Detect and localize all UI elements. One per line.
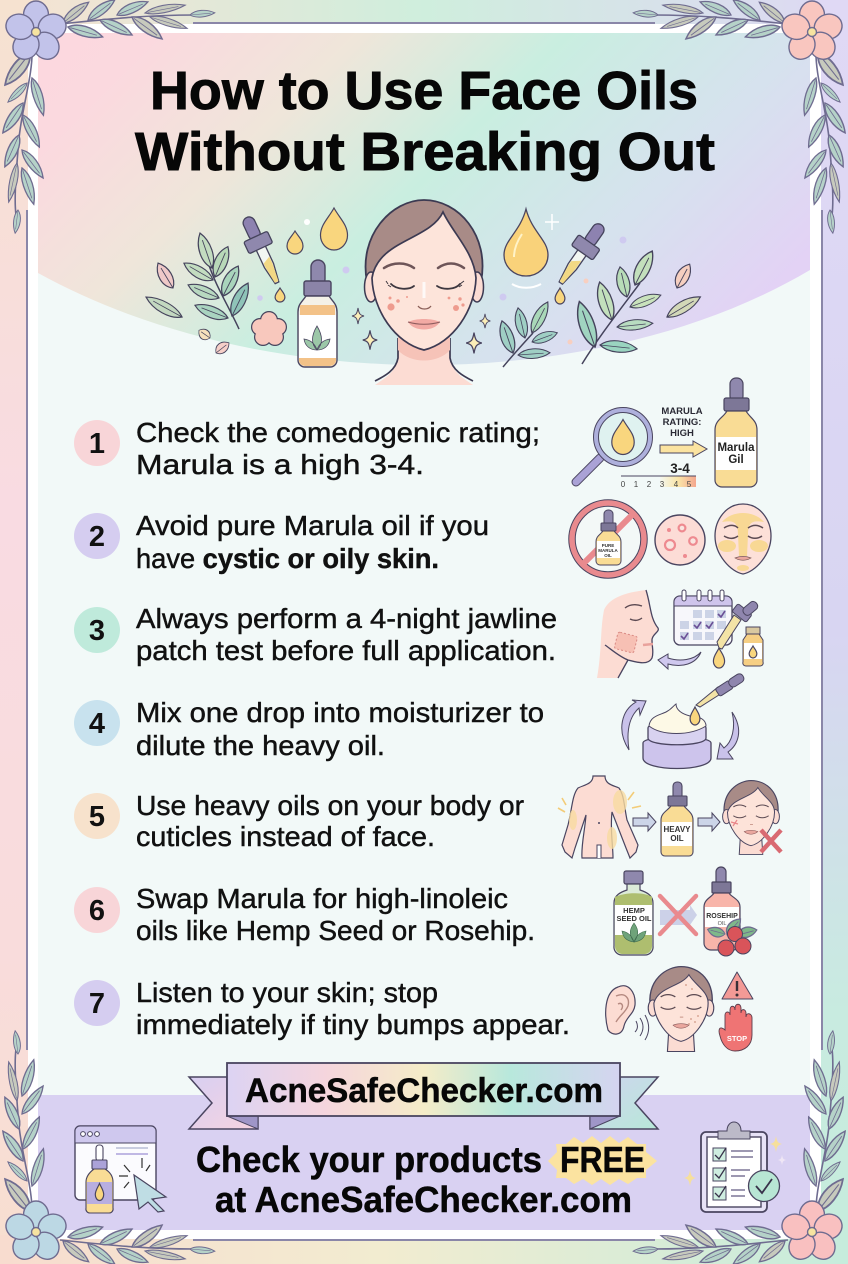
FREE starburst: [548, 1136, 657, 1185]
dropper right: [550, 217, 612, 290]
step 1: 1: [89, 428, 105, 460]
icon: comedogenic rating: 3: [660, 480, 665, 489]
icon: comedogenic rating: [576, 378, 757, 489]
step 1: Check the comedogenic rating;: [136, 417, 540, 448]
icon: no pure oil: [572, 503, 771, 575]
step 3: [74, 603, 557, 666]
step 2: Avoid pure Marula oil if you: [136, 510, 489, 541]
sparkles: [352, 308, 490, 353]
icon: no pure oil: PURE: [602, 543, 614, 548]
step 3: patch test before full application.: [136, 635, 556, 666]
step 7: immediately if tiny bumps appear.: [136, 1009, 570, 1040]
icon: comedogenic rating: HIGH: [670, 428, 694, 439]
icon: patch test: [597, 590, 763, 678]
step 2: [74, 510, 489, 574]
icon: listen to skin: [606, 967, 753, 1051]
floral garland: bottom left: [0, 1030, 215, 1264]
step 3: Always perform a 4-night jawline: [136, 603, 557, 634]
icon: clipboard checklist: [684, 1122, 786, 1212]
icon: body application: HEAVY: [664, 825, 691, 834]
icon: swap oils: OIL: [718, 921, 726, 927]
step 4: [74, 697, 544, 761]
icon: swap oils: SEED OIL: [616, 914, 652, 923]
icon: comedogenic rating: 3-4: [670, 461, 690, 476]
step 2: 2: [89, 521, 105, 553]
icon: browser with bottle and cursor: [75, 1126, 166, 1213]
banner: AcneSafeChecker.com: AcneSafeChecker.com: [245, 1072, 603, 1110]
step 5: 5: [89, 801, 105, 833]
step 1: Marula is a high 3-4.: [136, 449, 424, 480]
title: Without Breaking Out: [135, 122, 715, 182]
icon: comedogenic rating: 2: [647, 480, 652, 489]
step 7: 7: [89, 988, 105, 1020]
icon: swap oils: HEMP: [623, 906, 645, 915]
icon: comedogenic rating: RATING:: [663, 417, 701, 428]
icon: comedogenic rating: 1: [634, 480, 639, 489]
oil drops: [257, 208, 626, 344]
step 1: [74, 417, 540, 480]
step 4: 4: [89, 708, 105, 740]
icon: no pure oil: MARULA: [598, 548, 618, 553]
floral garland: top right: [633, 0, 848, 234]
step 6: [74, 883, 535, 946]
step 7: [74, 977, 570, 1040]
icon: comedogenic rating: MARULA: [661, 406, 703, 417]
icon: comedogenic rating: 4: [674, 480, 679, 489]
leaf branches: [143, 231, 703, 367]
title: [135, 61, 715, 182]
step 6: Swap Marula for high-linoleic: [136, 883, 508, 914]
woman's face: [364, 200, 484, 385]
dropper left: [235, 212, 289, 288]
panel: footer band: [38, 1095, 810, 1230]
hero illustration: [143, 200, 703, 385]
step 5: cuticles instead of face.: [136, 821, 435, 852]
step 7: Listen to your skin; stop: [136, 977, 438, 1008]
icon: swap oils: ROSEHIP: [706, 913, 738, 920]
step 4: dilute the heavy oil.: [136, 730, 385, 761]
icon: comedogenic rating: 5: [687, 480, 692, 489]
floral garland: bottom right: [633, 1030, 848, 1264]
icon: comedogenic rating: 0: [621, 480, 626, 489]
step 2: have cystic or oily skin.: [136, 543, 439, 574]
step 6: oils like Hemp Seed or Rosehip.: [136, 915, 535, 946]
call to action: FREE: [560, 1139, 645, 1180]
icon: body application: [558, 776, 781, 858]
icon: swap oils: [614, 867, 758, 956]
icon: listen to skin: STOP: [727, 1034, 747, 1043]
icon: body application: OIL: [670, 834, 684, 843]
title: How to Use Face Oils: [150, 61, 698, 121]
step 6: 6: [89, 895, 105, 927]
step 3: 3: [89, 615, 105, 647]
floral garland: top left: [0, 0, 215, 234]
step 4: Mix one drop into moisturizer to: [136, 697, 544, 728]
icon: mix into moisturizer: [622, 672, 745, 768]
call to action: [196, 1136, 657, 1220]
panel: hero gradient: [38, 33, 810, 365]
call to action: Check your products: [196, 1139, 542, 1180]
icon: no pure oil: OIL: [604, 553, 612, 558]
banner: AcneSafeChecker.com: [189, 1063, 658, 1129]
serum bottle: [298, 260, 337, 367]
step 5: Use heavy oils on your body or: [136, 790, 524, 821]
call to action: at AcneSafeChecker.com: [215, 1179, 632, 1220]
icon: comedogenic rating: Gil: [728, 454, 744, 466]
icon: comedogenic rating: Marula: [717, 442, 755, 454]
step 5: [74, 790, 524, 852]
